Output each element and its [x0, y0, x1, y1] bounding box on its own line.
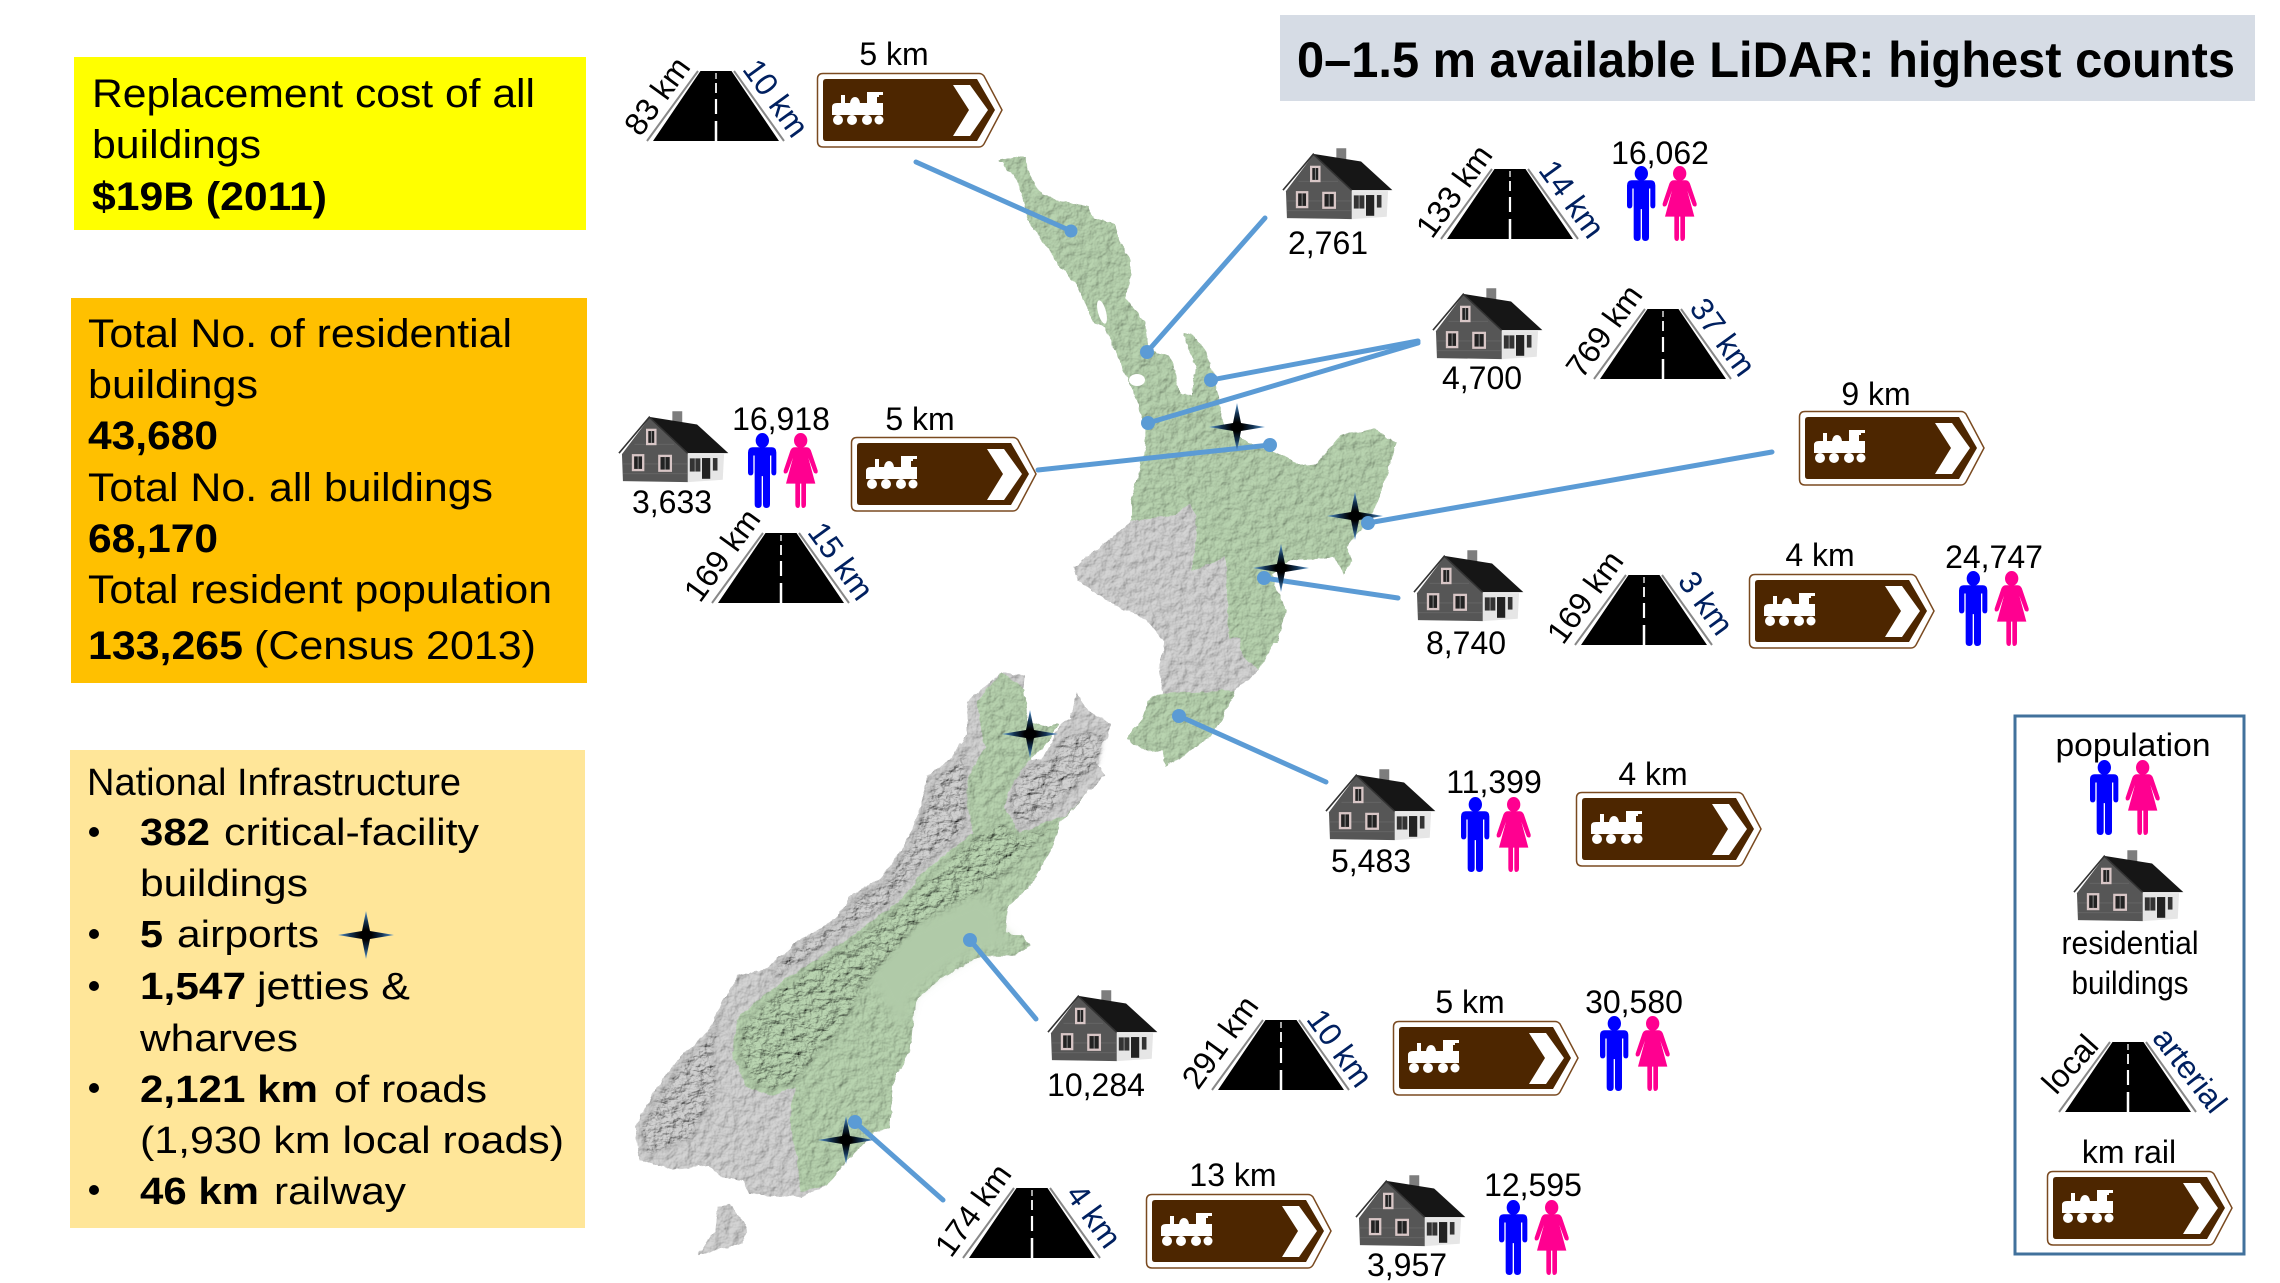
cluster: Hawke's Bay — [1414, 537, 2043, 661]
cluster: Hawke's Bay: 4 km — [1785, 537, 1855, 573]
panel: building and population totals: Total No. all buildings — [88, 466, 493, 510]
cluster: Auckland north: 14 km — [1532, 153, 1612, 245]
cluster: Gisborne rail — [1800, 376, 1984, 485]
cluster: Northland: 10 km — [736, 52, 816, 144]
cluster: Auckland and Coromandel: 4,700 — [1442, 360, 1522, 396]
cluster: Wellington: 11,399 — [1446, 764, 1542, 800]
panel: building and population totals: buildings — [88, 363, 258, 407]
panel: replacement cost: buildings — [92, 123, 261, 167]
cluster: Hawke's Bay: 169 km — [1540, 544, 1630, 650]
panel: building and population totals — [71, 298, 587, 683]
legend: arterial — [2146, 1020, 2234, 1120]
cluster: Otago — [928, 1157, 1582, 1283]
cluster: Canterbury: 5 km — [1435, 984, 1505, 1020]
cluster: Auckland and Coromandel: 37 km — [1683, 291, 1763, 383]
panel: national infrastructure: (1,930 km local roads) — [140, 1120, 564, 1162]
cluster: Northland: 83 km — [617, 50, 697, 142]
cluster: Bay of Plenty: 16,918 — [732, 401, 830, 437]
panel: replacement cost: Replacement cost of all — [92, 72, 535, 116]
panel: building and population totals: 68,170 — [88, 517, 218, 561]
panel: national infrastructure: of roads — [334, 1069, 487, 1111]
cluster: Hawke's Bay: 8,740 — [1426, 625, 1506, 661]
cluster: Auckland and Coromandel — [1433, 278, 1763, 396]
cluster: Otago: 12,595 — [1484, 1167, 1582, 1203]
legend — [2015, 716, 2244, 1254]
airport stars on the map — [818, 403, 1383, 1164]
panel: national infrastructure: 1,547 — [140, 966, 246, 1008]
cluster: Hawke's Bay: 24,747 — [1945, 539, 2043, 575]
cluster: Auckland and Coromandel: 769 km — [1559, 278, 1649, 384]
cluster: Bay of Plenty — [619, 401, 1036, 608]
panel: national infrastructure: jetties & — [256, 966, 410, 1008]
panel: building and population totals: (Census 2013) — [254, 624, 536, 668]
title — [1280, 15, 2255, 101]
panel: replacement cost — [74, 57, 586, 230]
cluster: Otago: 3,957 — [1367, 1247, 1447, 1283]
panel: national infrastructure: railway — [274, 1171, 406, 1213]
cluster: Otago: 174 km — [928, 1157, 1018, 1263]
cluster: Auckland north — [1283, 135, 1709, 261]
panel: national infrastructure: airports — [177, 914, 319, 956]
cluster: Wellington: 5,483 — [1331, 843, 1411, 879]
panel: replacement cost: $19B (2011) — [92, 175, 327, 219]
legend: local — [2035, 1028, 2105, 1100]
panel: building and population totals: Total No. of residential — [88, 312, 512, 356]
cluster: Hawke's Bay: 3 km — [1671, 564, 1741, 642]
cluster: Otago: 4 km — [1059, 1177, 1129, 1255]
legend: residential — [2062, 925, 2198, 961]
cluster: Auckland north: 16,062 — [1611, 135, 1709, 171]
panel: building and population totals: Total resident population — [88, 568, 552, 612]
legend: buildings — [2072, 965, 2188, 1001]
cluster: Canterbury: 291 km — [1175, 989, 1265, 1095]
legend: population — [2056, 727, 2210, 763]
cluster: Northland: 5 km — [859, 36, 929, 72]
cluster: Bay of Plenty: 5 km — [885, 401, 955, 437]
panel: national infrastructure: 382 — [140, 812, 210, 854]
cluster: Wellington: 4 km — [1618, 756, 1688, 792]
legend: km rail — [2082, 1134, 2176, 1170]
panel: national infrastructure: National Infrastructure — [87, 762, 461, 804]
panel: national infrastructure: buildings — [140, 863, 308, 905]
panel: national infrastructure: critical-facility — [224, 812, 479, 854]
map: New Zealand relief — [634, 156, 1396, 1255]
cluster: Auckland north: 2,761 — [1288, 225, 1368, 261]
panel: national infrastructure: wharves — [139, 1018, 298, 1060]
connector lines and location dots — [855, 162, 1772, 1200]
cluster: Canterbury: 10,284 — [1047, 1067, 1145, 1103]
cluster: Canterbury: 30,580 — [1585, 984, 1683, 1020]
cluster: Canterbury — [1047, 984, 1683, 1103]
panel: building and population totals: 43,680 — [88, 414, 218, 458]
cluster: Canterbury: 10 km — [1300, 1002, 1380, 1094]
panel: national infrastructure: 2,121 km — [140, 1069, 318, 1111]
cluster: Bay of Plenty: 15 km — [801, 515, 881, 607]
cluster: Northland — [617, 36, 1002, 147]
panel: national infrastructure — [70, 750, 585, 1228]
panel: national infrastructure: 46 km — [140, 1171, 259, 1213]
cluster: Bay of Plenty: 3,633 — [632, 484, 712, 520]
cluster: Bay of Plenty: 169 km — [677, 502, 767, 608]
cluster: Otago: 13 km — [1189, 1157, 1277, 1193]
panel: building and population totals: 133,265 — [88, 624, 243, 668]
cluster: Gisborne rail: 9 km — [1841, 376, 1911, 412]
title: 0–1.5 m available LiDAR: highest counts — [1297, 32, 2235, 88]
cluster: Auckland north: 133 km — [1409, 138, 1499, 244]
cluster: Wellington — [1326, 756, 1761, 879]
panel: national infrastructure: 5 — [140, 914, 163, 956]
